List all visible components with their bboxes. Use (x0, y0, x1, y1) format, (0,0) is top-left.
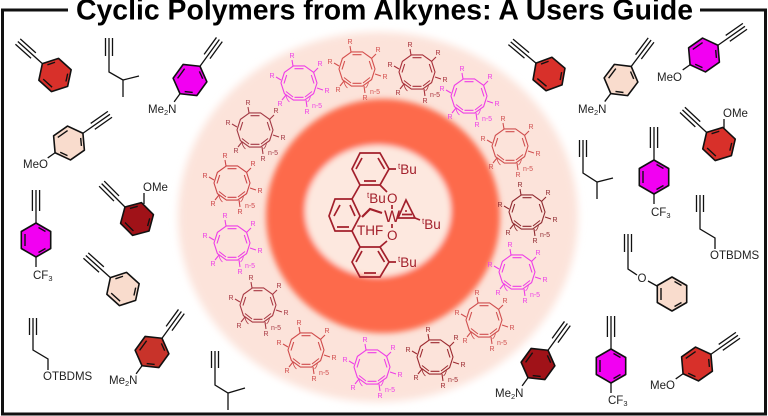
alkyne: phenyl propargyl ether: O (638, 273, 646, 285)
ring: magenta bottom: R (377, 393, 383, 400)
ring: dark red right: R (532, 238, 538, 245)
alkyne: pale phenylacetylene (76, 245, 145, 311)
ring: magenta left: R (257, 248, 263, 255)
panel: catalyst halo (266, 99, 500, 333)
ring: magenta top left: R (304, 109, 310, 116)
alkyne: OTBDMS left: OTBDMS (43, 371, 93, 383)
ring: magenta top left: R (317, 61, 323, 68)
ring: magenta left: n-5 (245, 263, 255, 270)
ring: salmon lower right: R (462, 338, 468, 345)
ring: dark red lower left: R (228, 295, 234, 302)
ring: magenta top left: R (269, 73, 275, 80)
ring: magenta bottom: R (350, 385, 356, 392)
ring: dark red upper left: R (233, 148, 239, 155)
alkyne: dark red ortho-methoxyphenyl: OMe (143, 182, 168, 194)
ring: dark red lower left: n-5 (271, 325, 281, 332)
ring: dark red top: R (435, 50, 441, 57)
alkyne: OTBDMS right: OTBDMS (710, 250, 760, 262)
ring: magenta right: R (522, 298, 528, 305)
alkyne: phenyl propargyl ether (624, 234, 687, 311)
tungsten catalyst: t (398, 255, 401, 264)
ring: salmon left: R (202, 173, 208, 180)
ring: dark red lower left: R (283, 310, 289, 317)
tungsten catalyst: O (387, 191, 398, 206)
alkyne: isobutyl bottom (212, 351, 245, 410)
alkyne: red phenylacetylene, top right (501, 31, 571, 96)
ring: magenta top right: R (474, 122, 480, 129)
ring: dark red top: R (395, 90, 401, 97)
ring: dark red upper left: R (280, 135, 286, 142)
ring: dark red right: R (517, 182, 523, 189)
ring: magenta right: R (495, 290, 501, 297)
alkyne: pale dimethylaminophenyl: Me (578, 104, 594, 116)
ring: salmon top: R (382, 74, 388, 81)
alkyne: pale methoxyphenyl (23, 102, 118, 171)
ring: salmon upper right: R (515, 172, 521, 179)
ring: magenta bottom: R (362, 337, 368, 344)
alkyne: magenta trifluoromethylphenyl bottom (596, 316, 628, 408)
ring: salmon top: n-5 (370, 89, 380, 96)
ring: dark red upper left: R (260, 156, 266, 163)
alkyne: isobutyl top left (106, 38, 139, 97)
ring: salmon upper right: R (480, 136, 486, 143)
ring: salmon top: R (327, 59, 333, 66)
alkyne: OTBDMS left (30, 318, 93, 383)
ring: salmon bottom left: R (276, 340, 282, 347)
alkyne: magenta dimethylaminophenyl: Me (148, 104, 164, 116)
ring: salmon bottom left: R (331, 355, 337, 362)
tungsten catalyst: t (398, 162, 401, 171)
alkyne: magenta trifluoromethylphenyl upper right: 3 (666, 211, 671, 220)
alkyne: pale methoxyphenyl: MeO (23, 159, 48, 171)
ring: magenta top right: n-5 (482, 116, 492, 123)
ring: dark red lower left: R (236, 323, 242, 330)
ring: dark red top: R (422, 98, 428, 105)
ring: magenta left: R (237, 269, 243, 276)
ring: salmon upper right: n-5 (523, 166, 533, 173)
alkyne: magenta trifluoromethylphenyl upper right (639, 127, 671, 220)
alkyne: magenta dimethylaminophenyl: 2 (164, 108, 168, 117)
ring: magenta top right: R (439, 86, 445, 93)
alkyne: isobutyl right (580, 140, 613, 199)
alkyne: red ortho-methoxyphenyl: OMe (723, 108, 748, 120)
ring: salmon lower right: R (502, 298, 508, 305)
alkyne: dark red ortho-methoxyphenyl (91, 173, 168, 241)
tungsten catalyst: Bu (400, 255, 417, 270)
ring: dark red bottom: R (453, 335, 459, 342)
tungsten catalyst: Bu (369, 191, 386, 206)
alkyne: magenta dimethylaminophenyl (148, 31, 231, 117)
alkyne: dark red dimethylaminophenyl: Me (495, 388, 511, 400)
ring: magenta top left: R (277, 101, 283, 108)
ring: dark red bottom: R (460, 362, 466, 369)
alkyne: red methoxyphenyl (650, 323, 746, 392)
ring: salmon bottom left: n-5 (319, 370, 329, 377)
ring: salmon lower right: R (489, 346, 495, 353)
ring: salmon upper right: R (535, 151, 541, 158)
tungsten catalyst: W (384, 207, 400, 226)
tungsten catalyst (329, 153, 441, 277)
ring: magenta bottom: n-5 (385, 387, 395, 394)
ring: salmon left: n-5 (245, 203, 255, 210)
alkyne: red dimethylaminophenyl: Me (109, 375, 125, 387)
ring: salmon lower right (454, 290, 515, 353)
alkyne: magenta methoxyphenyl: MeO (657, 72, 682, 84)
tungsten catalyst: O (387, 228, 398, 243)
ring: salmon bottom left: R (311, 376, 317, 383)
alkyne: red ortho-methoxyphenyl (672, 99, 748, 166)
alkyne: magenta trifluoromethylphenyl left (21, 190, 53, 283)
alkyne: magenta trifluoromethylphenyl left: 3 (48, 274, 53, 283)
ring: dark red upper left: R (245, 100, 251, 107)
ring: dark red top (387, 42, 448, 105)
ring: magenta top right: R (447, 114, 453, 121)
alkyne: magenta trifluoromethylphenyl upper right: CF (651, 207, 666, 219)
alkyne: magenta trifluoromethylphenyl left: CF (33, 270, 48, 282)
ring: salmon left (202, 153, 263, 216)
ring: dark red bottom: R (405, 347, 411, 354)
ring: magenta top right: R (459, 66, 465, 73)
ring: magenta top right: R (494, 101, 500, 108)
alkyne: pale dimethylaminophenyl: 2 (594, 108, 598, 117)
ring: magenta right: R (542, 277, 548, 284)
ring: dark red top: R (387, 62, 393, 69)
ring: salmon lower right: R (454, 310, 460, 317)
ring: dark red top: R (442, 77, 448, 84)
panel: polymer rings (202, 39, 558, 400)
ring: dark red right: R (552, 217, 558, 224)
ring: salmon left: R (237, 209, 243, 216)
ring: salmon top: R (362, 95, 368, 102)
ring: salmon upper right: R (528, 124, 534, 131)
ring: magenta right: n-5 (530, 292, 540, 299)
alkyne: red dimethylaminophenyl: 2 (125, 379, 129, 388)
alkyne: magenta methoxyphenyl (657, 14, 753, 84)
ring: magenta top right (439, 66, 500, 129)
tungsten catalyst: THF (357, 223, 383, 238)
alkyne: dark red dimethylaminophenyl: N (515, 388, 523, 400)
alkyne: magenta dimethylaminophenyl: N (168, 104, 176, 116)
ring: dark red bottom (405, 327, 466, 390)
ring: salmon lower right: n-5 (497, 340, 507, 347)
ring: dark red lower left (228, 275, 289, 338)
ring: magenta top left (269, 53, 330, 116)
ring: magenta right (487, 242, 548, 305)
alkyne: red phenylacetylene, top left (8, 31, 77, 97)
ring: salmon left: R (210, 201, 216, 208)
ring: dark red upper left: R (225, 120, 231, 127)
ring: salmon top: R (347, 39, 353, 46)
ring: dark red right: n-5 (540, 232, 550, 239)
alkyne: red methoxyphenyl: MeO (650, 380, 675, 392)
ring: salmon left: R (222, 153, 228, 160)
ring: magenta top left: R (289, 53, 295, 60)
alkyne: magenta trifluoromethylphenyl bottom: 3 (623, 399, 628, 408)
ring: dark red lower left: R (263, 331, 269, 338)
ring: salmon top: R (375, 47, 381, 54)
ring: salmon lower right: R (474, 290, 480, 297)
ring: salmon left: R (257, 188, 263, 195)
ring: magenta top left: R (324, 88, 330, 95)
ring: salmon bottom left: R (284, 368, 290, 375)
ring: dark red upper left: R (273, 108, 279, 115)
ring: magenta bottom: R (342, 357, 348, 364)
ring: magenta top left: n-5 (312, 103, 322, 110)
ring: salmon bottom left: R (296, 320, 302, 327)
alkyne: magenta trifluoromethylphenyl bottom: CF (608, 395, 623, 407)
ring: magenta left: R (222, 213, 228, 220)
ring: salmon top: R (335, 87, 341, 94)
ring: dark red bottom: R (413, 375, 419, 382)
ring: magenta bottom: R (397, 372, 403, 379)
tungsten catalyst: t (422, 217, 425, 226)
ring: dark red upper left (225, 100, 286, 163)
ring: salmon upper right: R (500, 116, 506, 123)
ring: magenta bottom: R (390, 345, 396, 352)
ring: magenta left: R (250, 221, 256, 228)
tungsten catalyst: Bu (424, 217, 441, 232)
ring: magenta right: R (507, 242, 513, 249)
ring: magenta left (202, 213, 263, 276)
ring: dark red lower left: R (276, 283, 282, 290)
ring: dark red bottom: R (440, 383, 446, 390)
ring: dark red top: R (407, 42, 413, 49)
ring: dark red right (497, 182, 558, 245)
ring: magenta right: R (535, 250, 541, 257)
panel: outer halo (178, 32, 578, 402)
ring: dark red right: R (505, 230, 511, 237)
alkyne: pale dimethylaminophenyl: N (598, 104, 606, 116)
ring: salmon bottom left: R (324, 328, 330, 335)
alkyne: pale dimethylaminophenyl (578, 31, 663, 117)
tungsten catalyst: Bu (400, 162, 417, 177)
ring: magenta right: R (487, 262, 493, 269)
ring: salmon lower right: R (509, 325, 515, 332)
ring: salmon bottom left (276, 320, 337, 383)
ring: dark red top: n-5 (430, 92, 440, 99)
alkyne: red dimethylaminophenyl: N (129, 375, 137, 387)
ring: dark red right: R (497, 202, 503, 209)
ring: dark red right: R (545, 190, 551, 197)
ring: magenta top right: R (487, 74, 493, 81)
ring: magenta bottom (342, 337, 403, 400)
ring: salmon top (327, 39, 388, 102)
ring: dark red upper left: n-5 (268, 150, 278, 157)
alkyne: dark red dimethylaminophenyl (495, 315, 579, 401)
ring: dark red lower left: R (248, 275, 254, 282)
alkyne: OTBDMS right (696, 195, 760, 262)
ring: magenta left: R (210, 261, 216, 268)
ring: salmon upper right: R (488, 164, 494, 171)
ring: salmon left: R (250, 161, 256, 168)
ring: dark red bottom: n-5 (448, 377, 458, 384)
ring: dark red bottom: R (425, 327, 431, 334)
tungsten catalyst: t (367, 191, 370, 200)
ring: magenta left: R (202, 233, 208, 240)
alkyne: dark red dimethylaminophenyl: 2 (511, 392, 515, 401)
alkyne: red dimethylaminophenyl (109, 303, 193, 388)
ring: salmon upper right (480, 116, 541, 179)
